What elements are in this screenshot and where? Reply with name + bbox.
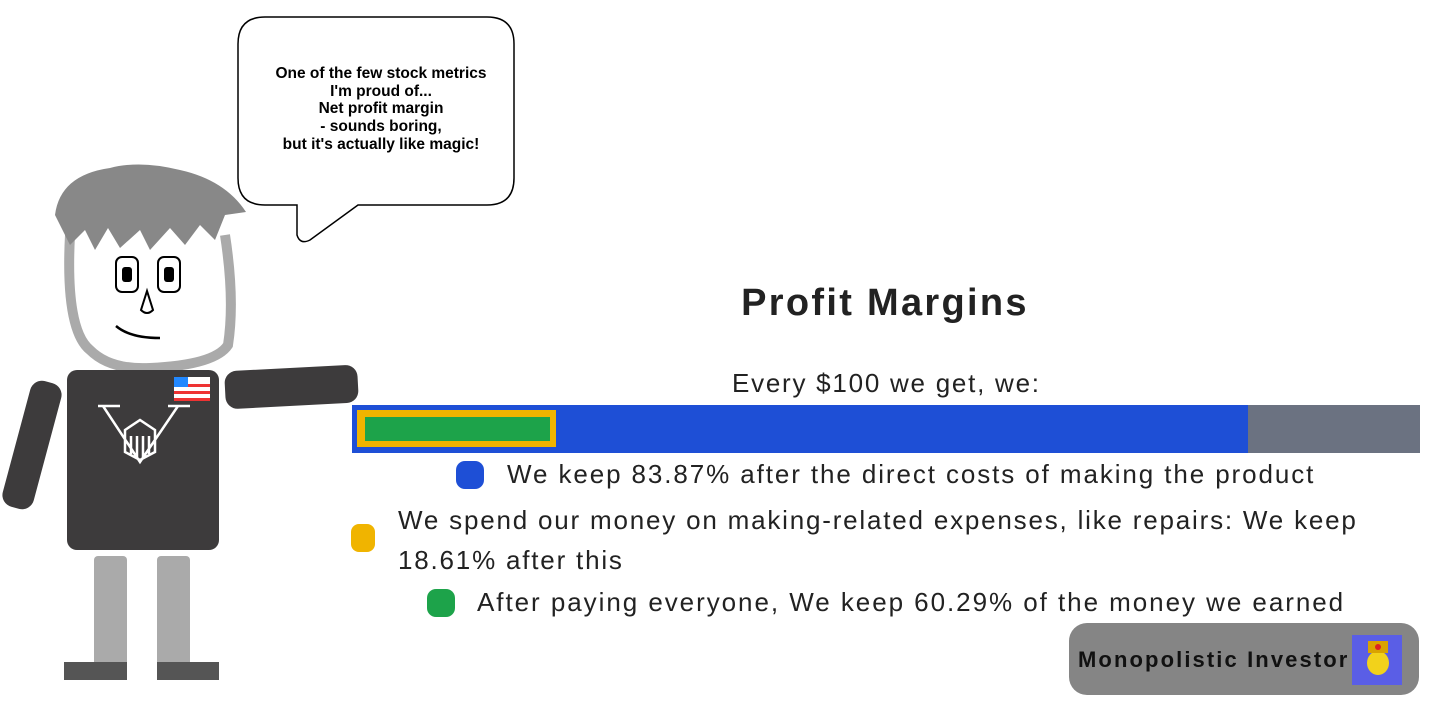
subtitle: Every $100 we get, we: xyxy=(732,368,1041,398)
speech bubble: I'm proud of... xyxy=(330,83,432,100)
left arm xyxy=(0,378,64,512)
speech bubble: - sounds boring, xyxy=(320,118,442,135)
body xyxy=(67,370,219,550)
speech bubble: Net profit margin xyxy=(319,100,443,117)
icon: mascot xyxy=(1352,635,1402,685)
badge xyxy=(1069,623,1419,695)
flag xyxy=(174,377,210,401)
head xyxy=(69,235,231,368)
hair xyxy=(55,164,246,250)
speech bubble: One of the few stock metrics xyxy=(275,65,487,82)
bar chart xyxy=(352,405,1420,453)
title: Profit Margins xyxy=(741,282,1029,324)
legend: green: After paying everyone, We keep 60.29% of the money we earned xyxy=(477,587,1345,617)
legend: blue: We keep 83.87% after the direct costs of making the product xyxy=(507,459,1315,489)
badge: Monopolistic Investor xyxy=(1078,647,1349,672)
right arm xyxy=(224,364,359,409)
legend: yellow: We spend our money on making-related expenses, like repairs: We keep xyxy=(398,505,1358,535)
character xyxy=(2,16,515,680)
legs xyxy=(94,556,127,666)
legend: yellow: 18.61% after this xyxy=(398,545,624,575)
speech bubble xyxy=(238,17,514,242)
logo xyxy=(98,406,190,462)
legend: yellow xyxy=(351,505,1358,575)
speech bubble: but it's actually like magic! xyxy=(283,136,479,153)
